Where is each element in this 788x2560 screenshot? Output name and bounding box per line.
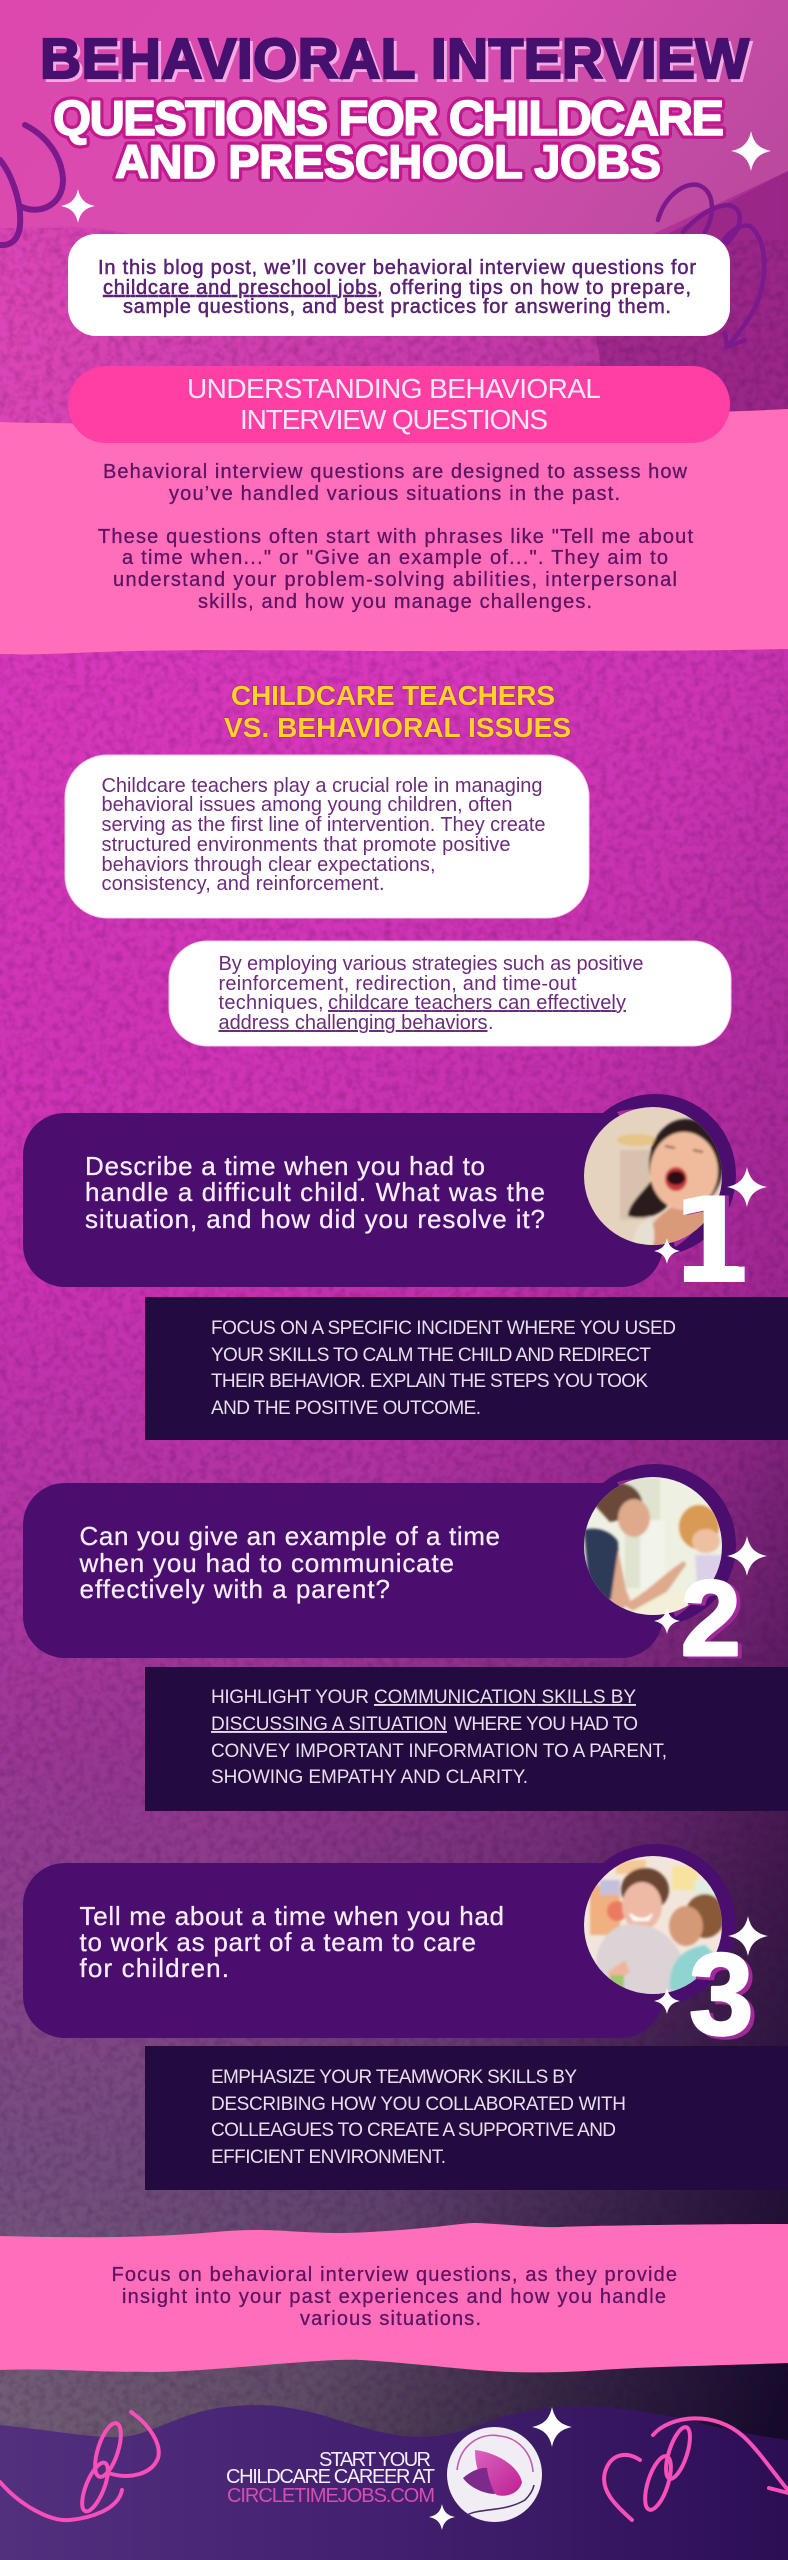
heading: childcare teachers vs behavioral issues: CHILDCARE TEACHERS [231,680,555,711]
footer text: CIRCLETIMEJOBS.COM [227,2485,435,2507]
strategies card text: By employing various strategies such as positive [218,953,644,975]
sparkle: large [727,1167,767,1207]
panel: understanding heading pill [68,366,730,443]
question 2 box [23,1483,663,1658]
title line: questions for childcare: QUESTIONS FOR CHILDCARE [53,92,724,146]
answer 1 text [211,1318,676,1419]
panel: strategies card [169,941,731,1046]
answer 2 text: WHERE YOU HAD TO [454,1714,638,1735]
answer 2 text [211,1687,667,1788]
focus text: insight into your past experiences and how you handle [122,2286,666,2308]
answer 1 text: THEIR BEHAVIOR. EXPLAIN THE STEPS YOU TOOK [211,1371,648,1392]
intro text: In this blog post, we’ll cover behavioral interview questions for [98,257,696,279]
question 3 text: to work as part of a team to care [80,1927,476,1957]
number 2: 2 [685,1560,745,1680]
question 3 text [80,1901,504,1983]
panel: answer 3 [145,2046,788,2190]
sparkle: logo small [429,2504,455,2530]
answer 1 text: AND THE POSITIVE OUTCOME. [211,1398,481,1419]
answer 2 text: CONVEY IMPORTANT INFORMATION TO A PARENT, [211,1741,667,1762]
intro text: , offering tips on how to prepare, [377,277,691,299]
text block: understanding body: you’ve handled various situations in the past. [169,483,620,505]
question 1 box [23,1113,663,1287]
panel: question 2 [23,1464,767,1680]
strategies card text: . [488,1012,494,1034]
question 2 text [78,1521,500,1604]
scribble: top left [0,125,63,245]
title [40,27,752,188]
answer 2 text: SHOWING EMPATHY AND CLARITY. [211,1767,528,1788]
question 3 ring [574,1844,736,2006]
panel: question 1 [23,1094,767,1287]
text block: understanding body: understand your problem-solving abilities, interpersonal [113,569,677,591]
photo: teacher smiling with child [584,1856,722,1994]
title line: and preschool jobs: AND PRESCHOOL JOBS [115,135,661,188]
answer 1 text: FOCUS ON A SPECIFIC INCIDENT WHERE YOU USED [211,1318,676,1339]
sparkle: small [654,1988,680,2014]
answer 3 text: EMPHASIZE YOUR TEAMWORK SKILLS BY [211,2067,577,2088]
question 3 text: Tell me about a time when you had [80,1901,504,1931]
question 3 box [23,1863,663,2038]
scribble arrow: top right [658,185,764,347]
question 2 text: Can you give an example of a time [80,1521,500,1551]
teachers card text: consistency, and reinforcement. [102,873,384,895]
text block: understanding body [98,461,693,613]
sparkle: top left [61,189,95,223]
footer text: START YOUR [319,2449,431,2471]
strategies card text: address challenging behaviors [218,1012,488,1034]
answer 3 text [211,2067,626,2168]
scribble arrow: footer right [604,2418,788,2520]
photo: teacher and child [584,1477,722,1615]
sparkle: top right [731,131,771,171]
pink band: understanding section [0,409,788,654]
title line: behavioral interview: BEHAVIORAL INTERVIEW [43,30,752,94]
title line: behavioral interview: BEHAVIORAL INTERVIEW [40,27,749,91]
intro text [98,257,696,318]
footer text: CHILDCARE CAREER AT [226,2466,435,2488]
scribble: footer left [0,2412,159,2520]
focus text: various situations. [300,2308,481,2330]
title line: questions for childcare: QUESTIONS FOR CHILDCARE [53,92,724,146]
strategies card text: reinforcement, redirection, and time-out [218,973,577,995]
panel: answer 2 [145,1667,788,1811]
answer 2 text: COMMUNICATION SKILLS BY [374,1687,636,1708]
heading: childcare teachers vs behavioral issues: VS. BEHAVIORAL ISSUES [224,712,571,743]
answer 3 text: COLLEAGUES TO CREATE A SUPPORTIVE AND [211,2120,616,2141]
number 3: 3 [689,1929,754,2059]
panel: intro card [68,234,730,336]
focus text: Focus on behavioral interview questions, as they provide [112,2264,677,2286]
panel: focus band [0,2223,788,2372]
heading text [187,373,601,435]
answer 1 text: YOUR SKILLS TO CALM THE CHILD AND REDIRECT [211,1345,651,1366]
sparkle: small [654,1238,680,1264]
sparkle: small [654,1608,680,1634]
teachers card text: serving as the first line of intervention. They create [102,814,546,836]
question 2 text: when you had to communicate [78,1548,454,1578]
answer 2 text: HIGHLIGHT YOUR [211,1687,369,1708]
photo: crying child [584,1107,722,1245]
teachers card text: structured environments that promote positive [102,834,510,856]
question 1 text: handle a difficult child. What was the [85,1177,545,1207]
number 1: 1 [674,1173,757,1311]
text block: understanding body: Behavioral interview questions are designed to assess how [103,461,688,483]
intro text: childcare and preschool jobs [103,277,377,299]
panel: teachers card [65,755,589,918]
heading: childcare teachers vs behavioral issues [224,680,571,743]
answer 3 text: DESCRIBING HOW YOU COLLABORATED WITH [211,2094,626,2115]
question 1 ring [574,1094,736,1256]
number 3: 3 [693,1932,758,2062]
footer panel [0,2405,788,2560]
question 3 text: for children. [80,1953,229,1983]
number 2: 2 [681,1558,741,1678]
number 1: 1 [670,1173,753,1311]
logo [447,2427,542,2522]
question 2 text: effectively with a parent? [80,1574,390,1604]
sparkle: large [727,1536,767,1576]
intro text: sample questions, and best practices for answering them. [123,296,671,318]
title line: and preschool jobs: AND PRESCHOOL JOBS [115,135,661,188]
panel: answer 1 [145,1297,788,1440]
question 2 ring [574,1464,736,1626]
footer text [226,2449,435,2507]
question 1 text: Describe a time when you had to [85,1151,485,1181]
strategies card text: childcare teachers can effectively [328,992,626,1014]
teachers card text: behavioral issues among young children, often [102,794,512,816]
text block: understanding body: skills, and how you manage challenges. [198,591,592,613]
question 1 text: situation, and how did you resolve it? [85,1204,545,1234]
focus text [112,2264,677,2330]
strategies card text [218,953,644,1034]
text block: understanding body: a time when..." or "Give an example of...". They aim to [122,547,668,569]
sparkle: logo large [532,2407,572,2447]
teachers card text: behaviors through clear expectations, [102,854,436,876]
heading text: UNDERSTANDING BEHAVIORAL [187,373,601,404]
text block: understanding body: These questions often start with phrases like "Tell me about [98,526,693,548]
sparkle: large [728,1916,768,1956]
strategies card text: techniques, [218,992,324,1014]
question 1 text [85,1151,545,1234]
answer 2 text: DISCUSSING A SITUATION [211,1714,447,1735]
heading text: INTERVIEW QUESTIONS [240,404,548,435]
answer 3 text: EFFICIENT ENVIRONMENT. [211,2147,446,2168]
panel: question 3 [23,1844,768,2040]
teachers card text [102,775,546,895]
teachers card text: Childcare teachers play a crucial role in managing [102,775,542,797]
